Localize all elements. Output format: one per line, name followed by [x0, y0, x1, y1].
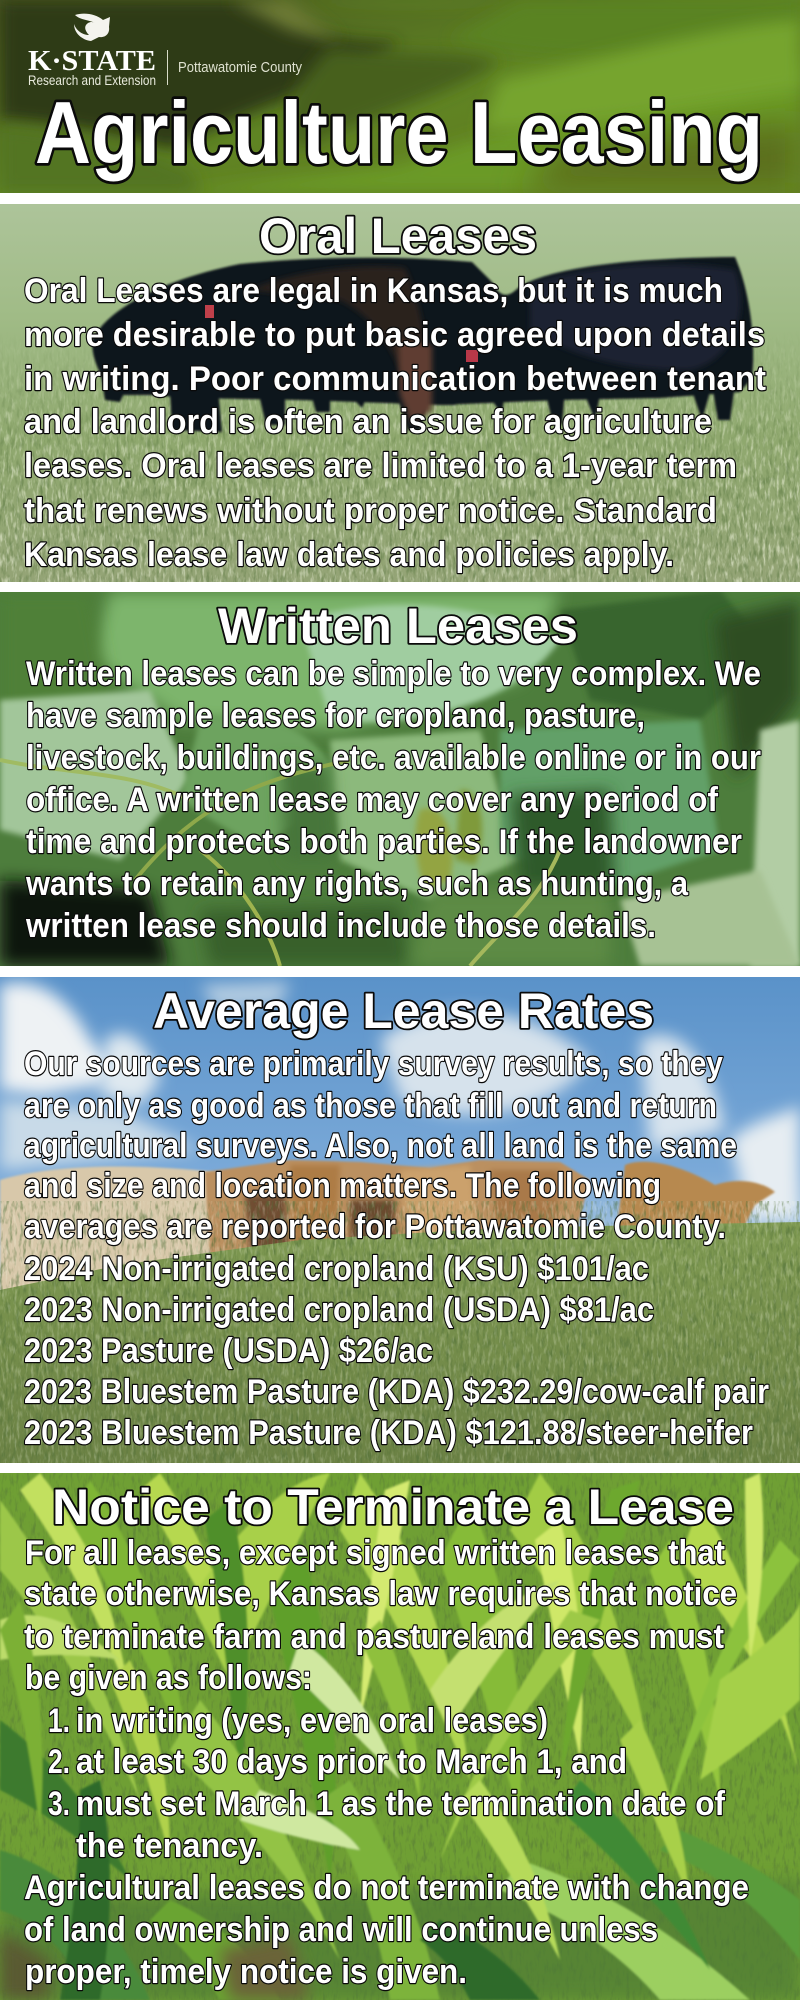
notice photo: corn field leaves	[0, 1473, 800, 2000]
text block: lease rates intro: are only as good as those that fill out and return	[24, 1087, 717, 1125]
text block: notice intro: state otherwise, Kansas law requires that notice	[24, 1575, 737, 1613]
list: reported lease rates: 2023 Pasture (USDA) $26/ac	[24, 1332, 433, 1370]
text block: oral leases body: Kansas lease law dates and policies apply.	[24, 536, 674, 574]
logo divider	[167, 50, 168, 85]
oral leases photo: black cattle on grass	[0, 204, 800, 582]
text block: written leases body: written lease should include those details.	[25, 907, 656, 945]
numbered list: notice requirements: 1.	[48, 1702, 70, 1740]
panel: notice to terminate	[0, 1473, 800, 2000]
text block: oral leases body: Oral Leases are legal in Kansas, but it is much	[24, 272, 723, 310]
header photo: green hills	[0, 0, 800, 193]
text block: oral leases body: leases. Oral leases are limited to a 1-year term	[24, 447, 737, 485]
numbered list: notice requirements: 2.	[48, 1743, 70, 1781]
cows	[92, 257, 753, 432]
text block: lease rates intro: Our sources are primarily survey results, so they	[24, 1045, 723, 1083]
panel: written leases	[0, 590, 800, 966]
text block: notice closing: proper, timely notice is given.	[25, 1953, 467, 1991]
numbered list: notice requirements: the tenancy.	[76, 1827, 263, 1865]
list: reported lease rates	[24, 1250, 769, 1452]
panel: average lease rates	[0, 977, 800, 1463]
logo subtitle: Research and Extension	[28, 72, 156, 88]
text block: oral leases body: that renews without proper notice. Standard	[24, 492, 717, 530]
list: reported lease rates: 2024 Non-irrigated cropland (KSU) $101/ac	[24, 1250, 649, 1288]
text block: notice intro	[24, 1534, 737, 1697]
text block: notice closing	[24, 1869, 749, 1991]
text block: lease rates intro: averages are reported for Pottawatomie County.	[24, 1208, 726, 1246]
text block: notice closing: Agricultural leases do not terminate with change	[24, 1869, 749, 1907]
numbered list: notice requirements: in writing (yes, even oral leases)	[76, 1702, 548, 1740]
text block: oral leases body	[24, 272, 766, 574]
text block: written leases body	[25, 655, 761, 945]
text block: oral leases body: and landlord is often an issue for agriculture	[24, 403, 712, 441]
numbered list: notice requirements: 3.	[48, 1785, 70, 1823]
grass hill	[0, 1222, 800, 1463]
average lease rates photo: tan cattle under blue sky	[0, 977, 800, 1463]
heading: average lease rates: Average Lease Rates	[153, 983, 654, 1039]
heading: oral leases: Oral Leases	[259, 208, 537, 264]
text block: written leases body: office. A written lease may cover any period of	[26, 781, 719, 819]
county name: Pottawatomie County	[178, 59, 302, 76]
list: reported lease rates: 2023 Non-irrigated cropland (USDA) $81/ac	[24, 1291, 654, 1329]
text block: written leases body: have sample leases for cropland, pasture,	[26, 697, 645, 735]
icon: wildcat head	[74, 14, 110, 41]
heading: notice to terminate a lease: Notice to Terminate a Lease	[52, 1479, 734, 1535]
text block: written leases body: wants to retain any rights, such as hunting, a	[25, 865, 689, 903]
numbered list: notice requirements: at least 30 days prior to March 1, and	[76, 1743, 627, 1781]
numbered list: notice requirements: must set March 1 as the termination date of	[76, 1785, 726, 1823]
logo wordmark: K·STATE	[28, 46, 156, 77]
text block: oral leases body: more desirable to put basic agreed upon details	[24, 316, 765, 354]
cattle	[0, 1167, 220, 1300]
text block: written leases body: time and protects both parties. If the landowner	[26, 823, 742, 861]
logo: K-State Research and Extension	[28, 14, 302, 88]
heading: written leases: Written Leases	[218, 598, 578, 654]
written leases photo: soybean leaves	[0, 590, 800, 966]
text block: notice intro: be given as follows:	[25, 1659, 312, 1697]
panel: oral leases	[0, 204, 800, 582]
text block: notice closing: of land ownership and will continue unless	[24, 1911, 658, 1949]
text block: lease rates intro	[24, 1045, 737, 1246]
text block: notice intro: For all leases, except signed written leases that	[25, 1534, 725, 1572]
panel: header	[0, 0, 800, 193]
text block: lease rates intro: and size and location matters. The following	[24, 1167, 661, 1205]
numbered list: notice requirements	[48, 1702, 726, 1865]
text block: oral leases body: in writing. Poor communication between tenant	[24, 360, 766, 398]
text block: notice intro: to terminate farm and pastureland leases must	[24, 1618, 724, 1656]
